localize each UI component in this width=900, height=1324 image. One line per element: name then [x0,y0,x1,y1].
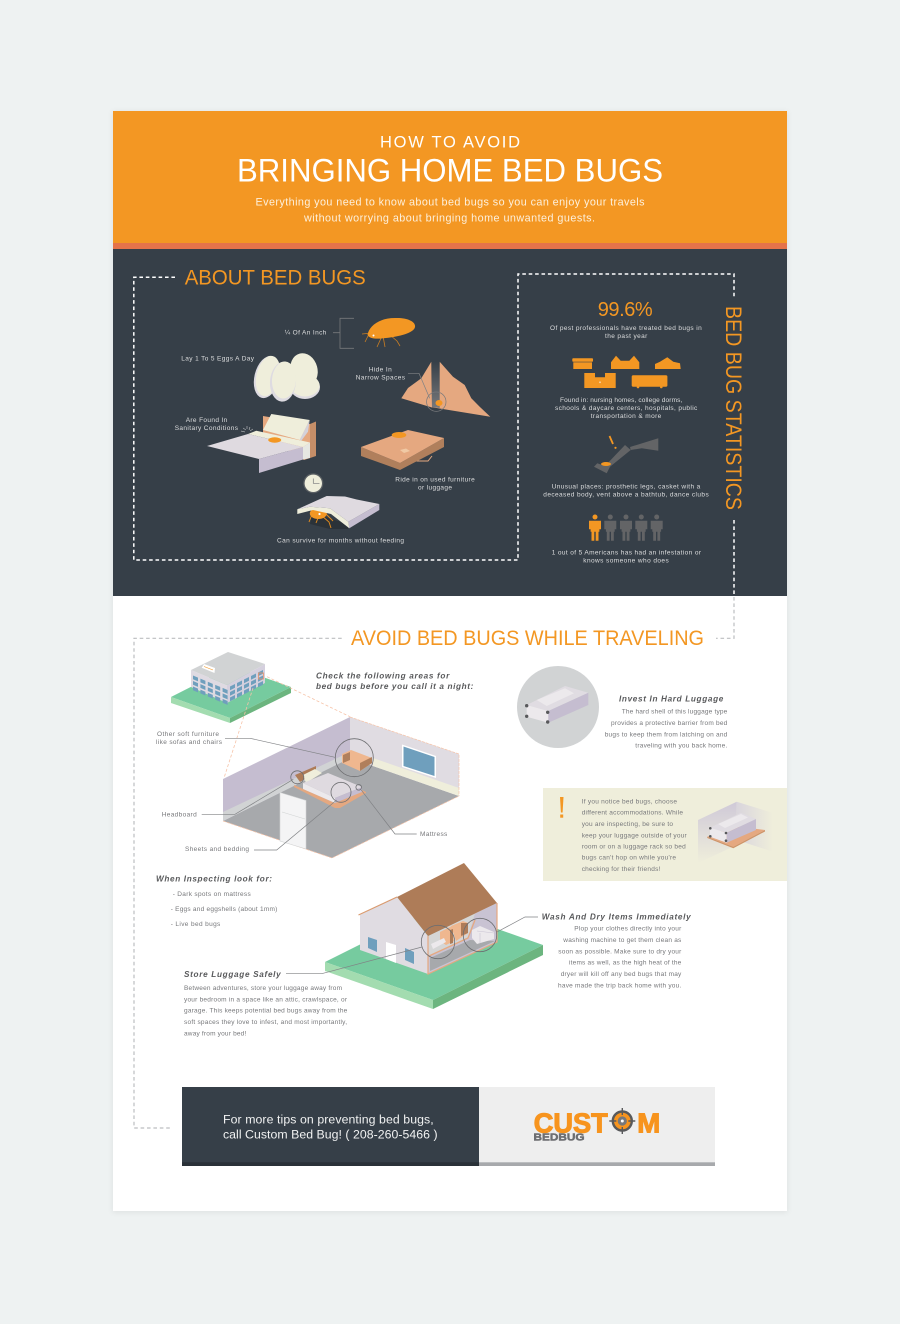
dashed frame: travel [134,597,734,1128]
text: when inspecting look for [156,875,277,928]
heading: avoid bed bugs while traveling: AVOID BED BUGS WHILE TRAVELING [351,627,704,650]
fact: furniture or luggage: Ride in on used furniture [395,477,475,484]
stat: 99.6 percent [550,299,702,340]
text: check the following areas: bed bugs before you call it a night: [316,682,474,691]
footer: logo [479,1087,715,1166]
fact: sanitary conditions [175,414,316,473]
icon: hard luggage in circle [517,666,599,748]
sofa [342,750,372,771]
icon: clock [303,473,323,493]
heading: about bed bugs: ABOUT BED BUGS [185,267,366,290]
callout text: you are inspecting, be sure to [582,821,673,828]
text: when inspecting look for: - Live bed bugs [171,921,221,928]
subtitle [256,197,645,225]
windows and door [368,937,414,964]
text: when inspecting look for: - Dark spots on mattress [173,891,251,898]
text: store luggage safely: away from your bed! [184,1030,246,1037]
text: wash and dry items: soon as possible. Make sure to dry your [558,948,682,955]
door [280,792,306,849]
callout text: checking for their friends! [582,866,661,873]
page card [113,111,787,1211]
leader lines [202,738,417,850]
text: invest in hard luggage: Invest In Hard Luggage [619,695,724,704]
callout text: keep your luggage outside of your [582,832,688,839]
illustration: hotel room [202,677,459,858]
room labels: Other soft furniture [157,731,219,738]
leader lines [286,917,538,974]
footer: logo: M [637,1108,660,1138]
text: wash and dry items: items as well, as the high heat of the [569,960,682,967]
text: wash and dry items [542,912,691,989]
icon: crack [401,362,490,417]
icon: luggage on rack [698,802,773,863]
text: invest in hard luggage: traveling with you back home. [635,743,727,750]
roof [358,863,497,936]
stat: locations: Found in: nursing homes, college dorms, [560,397,682,404]
icon: bed [207,414,316,473]
text: wash and dry items: have made the trip back home with you. [558,982,681,989]
callout text: bugs can't hop on while you're [582,855,676,862]
fact: furniture or luggage [361,430,475,492]
stat: unusual places: Unusual places: prosthetic legs, casket with a [552,483,701,490]
subtitle: without worrying about bringing home unwanted guests. [303,213,595,225]
text: wash and dry items: washing machine to get them clean as [562,937,682,944]
icon: suitcase [361,430,444,470]
fact: narrow spaces [356,362,490,417]
fact: narrow spaces: Hide In [369,367,392,374]
illustration: hotel [171,652,291,723]
stat: 99.6 percent: Of pest professionals have treated bed bugs in [550,325,702,332]
subtitle: Everything you need to know about bed bugs so you can enjoy your travels [256,197,645,209]
text: store luggage safely [184,970,348,1037]
stat: locations: schools & daycare centers, hospitals, public [555,405,698,412]
text: wash and dry items: Plop your clothes directly into your [574,926,682,933]
icon: mattress with bug [297,496,379,529]
fact: sanitary conditions: Are Found In [186,417,228,424]
dashed frame: about [134,274,734,560]
callout text [582,798,688,873]
callout circles [421,918,497,959]
icon: eggs [250,350,321,403]
callout text: different accommodations. While [582,810,683,817]
fact: narrow spaces: Narrow Spaces [356,375,406,382]
footer: call to action [182,1087,479,1166]
fact: eggs [181,350,321,403]
text: store luggage safely: garage. This keeps potential bed bugs away from the [184,1008,348,1015]
text: wash and dry items: Wash And Dry Items Immediately [542,912,691,921]
icon: prosthetic leg [594,436,658,473]
title: BRINGING HOME BED BUGS [237,153,663,189]
footer: call to action: For more tips on preventing bed bugs, [223,1112,434,1126]
title [237,134,663,189]
footer: call to action: call Custom Bed Bug! ( 208-260-5466 ) [223,1127,438,1141]
fact: furniture or luggage: or luggage [418,485,452,492]
illustration: house [286,863,543,1009]
heading: bed bug statistics: BED BUG STATISTICS [721,306,746,510]
icon: exclamation mark [560,797,564,818]
room labels [156,731,448,853]
text: wash and dry items: dryer will kill off any bed bugs that may [561,971,682,978]
icons: five people [589,514,663,541]
fact: sanitary conditions: Sanitary Conditions [175,425,239,432]
callout text: If you notice bed bugs, choose [582,798,677,805]
fact: eggs: Lay 1 To 5 Eggs A Day [181,356,255,363]
stat: 99.6 percent: the past year [605,333,648,340]
room labels: like sofas and chairs [156,739,223,746]
text: store luggage safely: your bedroom in a space like an attic, crawlspace, or [184,996,348,1003]
dashed connector: statistics to travel [733,520,735,596]
room labels: Mattress [420,831,448,838]
text: invest in hard luggage: bugs to keep them from latching on and [605,731,728,738]
fact: size of a bed bug: ¼ Of An Inch [285,330,327,337]
text: when inspecting look for: - Eggs and eggshells (about 1mm) [171,906,277,913]
text: when inspecting look for: When Inspecting look for: [156,875,272,884]
header banner [113,111,787,249]
text: check the following areas: Check the following areas for [316,672,450,681]
icon: bed bug [362,318,415,347]
stat: one in five Americans: 1 out of 5 Americans has had an infestation or [552,550,702,557]
text: store luggage safely: soft spaces they love to infest, and most importantly, [184,1019,347,1026]
footer: logo: BEDBUG [534,1133,584,1144]
fact: survive without feeding: Can survive for months without feeding [277,537,404,544]
text: invest in hard luggage: provides a protective barrier from bed [611,720,728,727]
stat: locations: transportation & more [591,413,662,420]
room labels: Headboard [162,811,197,818]
stat: locations [555,356,698,420]
callout: if you notice bed bugs [543,788,787,881]
stat: one in five Americans: knows someone who does [583,558,669,565]
text: invest in hard luggage [605,695,728,750]
bed [294,766,366,808]
window [402,744,436,778]
stat: unusual places: deceased body, vent above a bathtub, dance clubs [543,491,709,498]
cutaway interior [428,903,497,974]
icon: target [609,1108,635,1134]
stat: 99.6 percent: 99.6% [598,299,653,321]
text: store luggage safely: Store Luggage Safely [184,970,281,979]
callout text: room or on a luggage rack so bed [582,844,686,851]
stat: unusual places [543,436,709,498]
fact: survive without feeding [277,473,404,544]
text: invest in hard luggage: The hard shell of this luggage type [622,709,728,716]
dark panel: about bed bugs and statistics [113,249,787,596]
title: HOW TO AVOID [380,134,520,152]
room labels: Sheets and bedding [185,846,249,853]
stat: one in five Americans [552,514,702,565]
fact: size of a bed bug [285,318,415,348]
footer: logo: CUST [534,1108,608,1138]
callout circles [291,739,373,802]
text: check the following areas [316,672,474,691]
icons: buildings [572,356,681,388]
text: store luggage safely: Between adventures, store your luggage away from [184,985,342,992]
